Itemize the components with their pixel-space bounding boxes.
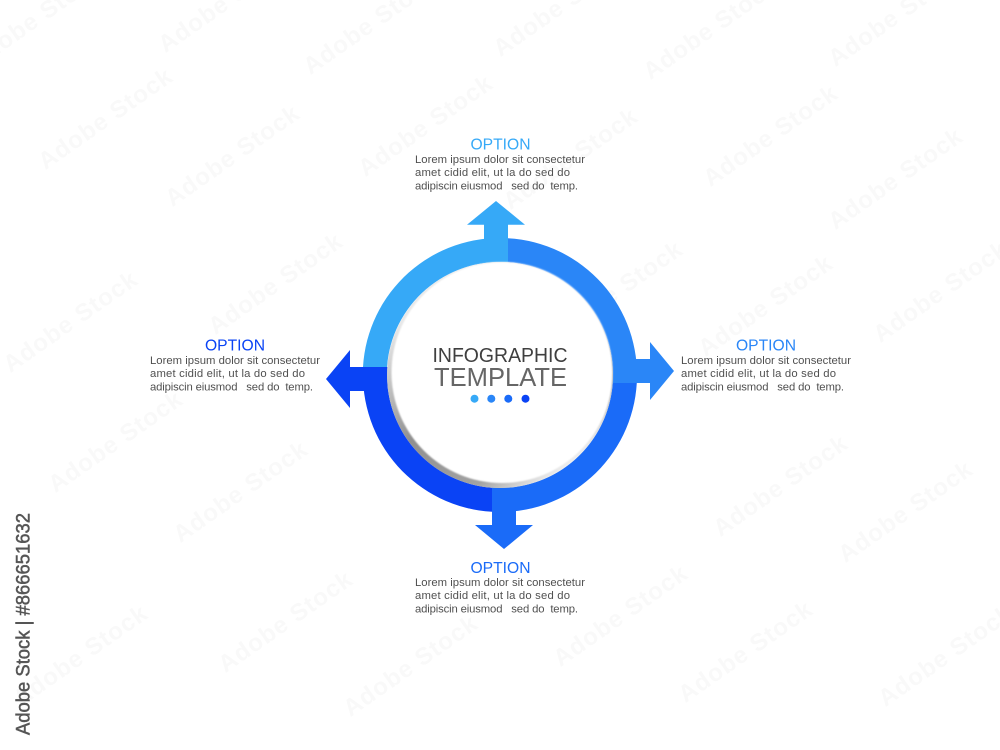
text block: left option: OPTION — [205, 338, 265, 354]
watermark pattern: Adobe Stock — [338, 610, 483, 722]
text block: left option: adipiscin eiusmod sed do temp. — [150, 382, 313, 394]
watermark pattern: Adobe Stock — [543, 236, 688, 348]
text block: bottom option: adipiscin eiusmod sed do temp. — [415, 604, 578, 616]
diagram: ring with four arrows — [326, 201, 674, 549]
text block: bottom option: amet cidid elit, ut la do sed do — [415, 590, 570, 602]
centre circle — [387, 262, 613, 488]
text block: right option: Lorem ipsum dolor sit consectetur — [681, 355, 851, 367]
ring segment and arrow: left — [326, 350, 492, 512]
stock id label: Adobe Stock | #866651632 — [12, 513, 34, 735]
text block: top option: Lorem ipsum dolor sit consectetur — [415, 154, 585, 166]
text block: right option: adipiscin eiusmod sed do temp. — [681, 382, 844, 394]
watermark pattern: Adobe Stock — [203, 228, 348, 340]
watermark pattern: Adobe Stock — [698, 80, 843, 192]
watermark pattern: Adobe Stock — [693, 250, 838, 362]
watermark pattern: Adobe Stock — [548, 560, 693, 672]
text block: left option: amet cidid elit, ut la do sed do — [150, 368, 305, 380]
title: INFOGRAPHIC — [432, 345, 568, 367]
watermark pattern: Adobe Stock — [673, 596, 818, 708]
text block: right option — [681, 338, 851, 394]
watermark pattern: Adobe Stock — [0, 266, 143, 378]
text block: top option: adipiscin eiusmod sed do temp. — [415, 180, 578, 192]
title — [432, 345, 568, 392]
watermark pattern: Adobe Stock — [498, 103, 643, 215]
title: TEMPLATE — [434, 364, 567, 392]
text block: bottom option: OPTION — [470, 560, 530, 577]
text block: bottom option: Lorem ipsum dolor sit consectetur — [415, 577, 585, 589]
text block: left option — [150, 338, 320, 394]
text block: top option — [415, 136, 585, 192]
four coloured dots — [470, 395, 530, 403]
text block: top option: OPTION — [470, 136, 530, 154]
watermark pattern: Adobe Stock — [213, 566, 358, 678]
ring segment and arrow: right — [508, 238, 674, 400]
watermark pattern: Adobe Stock — [823, 123, 968, 235]
watermark pattern: Adobe Stock — [160, 100, 305, 212]
ring segment and arrow: top — [363, 201, 525, 367]
text block: right option: OPTION — [736, 338, 796, 354]
watermark pattern: Adobe Stock — [8, 600, 153, 712]
watermark pattern: Adobe Stock — [353, 70, 498, 182]
text block: bottom option — [415, 560, 585, 616]
text block: top option: amet cidid elit, ut la do sed do — [415, 167, 570, 179]
watermark pattern: Adobe Stock — [33, 63, 178, 175]
ring segment and arrow: bottom — [475, 383, 637, 549]
watermark pattern: Adobe Stock — [43, 386, 188, 498]
watermark pattern: Adobe Stock — [168, 436, 313, 548]
text block: right option: amet cidid elit, ut la do sed do — [681, 368, 836, 380]
watermark pattern: Adobe Stock — [833, 456, 978, 568]
text block: left option: Lorem ipsum dolor sit consectetur — [150, 355, 320, 367]
watermark pattern: Adobe Stock — [708, 430, 853, 542]
